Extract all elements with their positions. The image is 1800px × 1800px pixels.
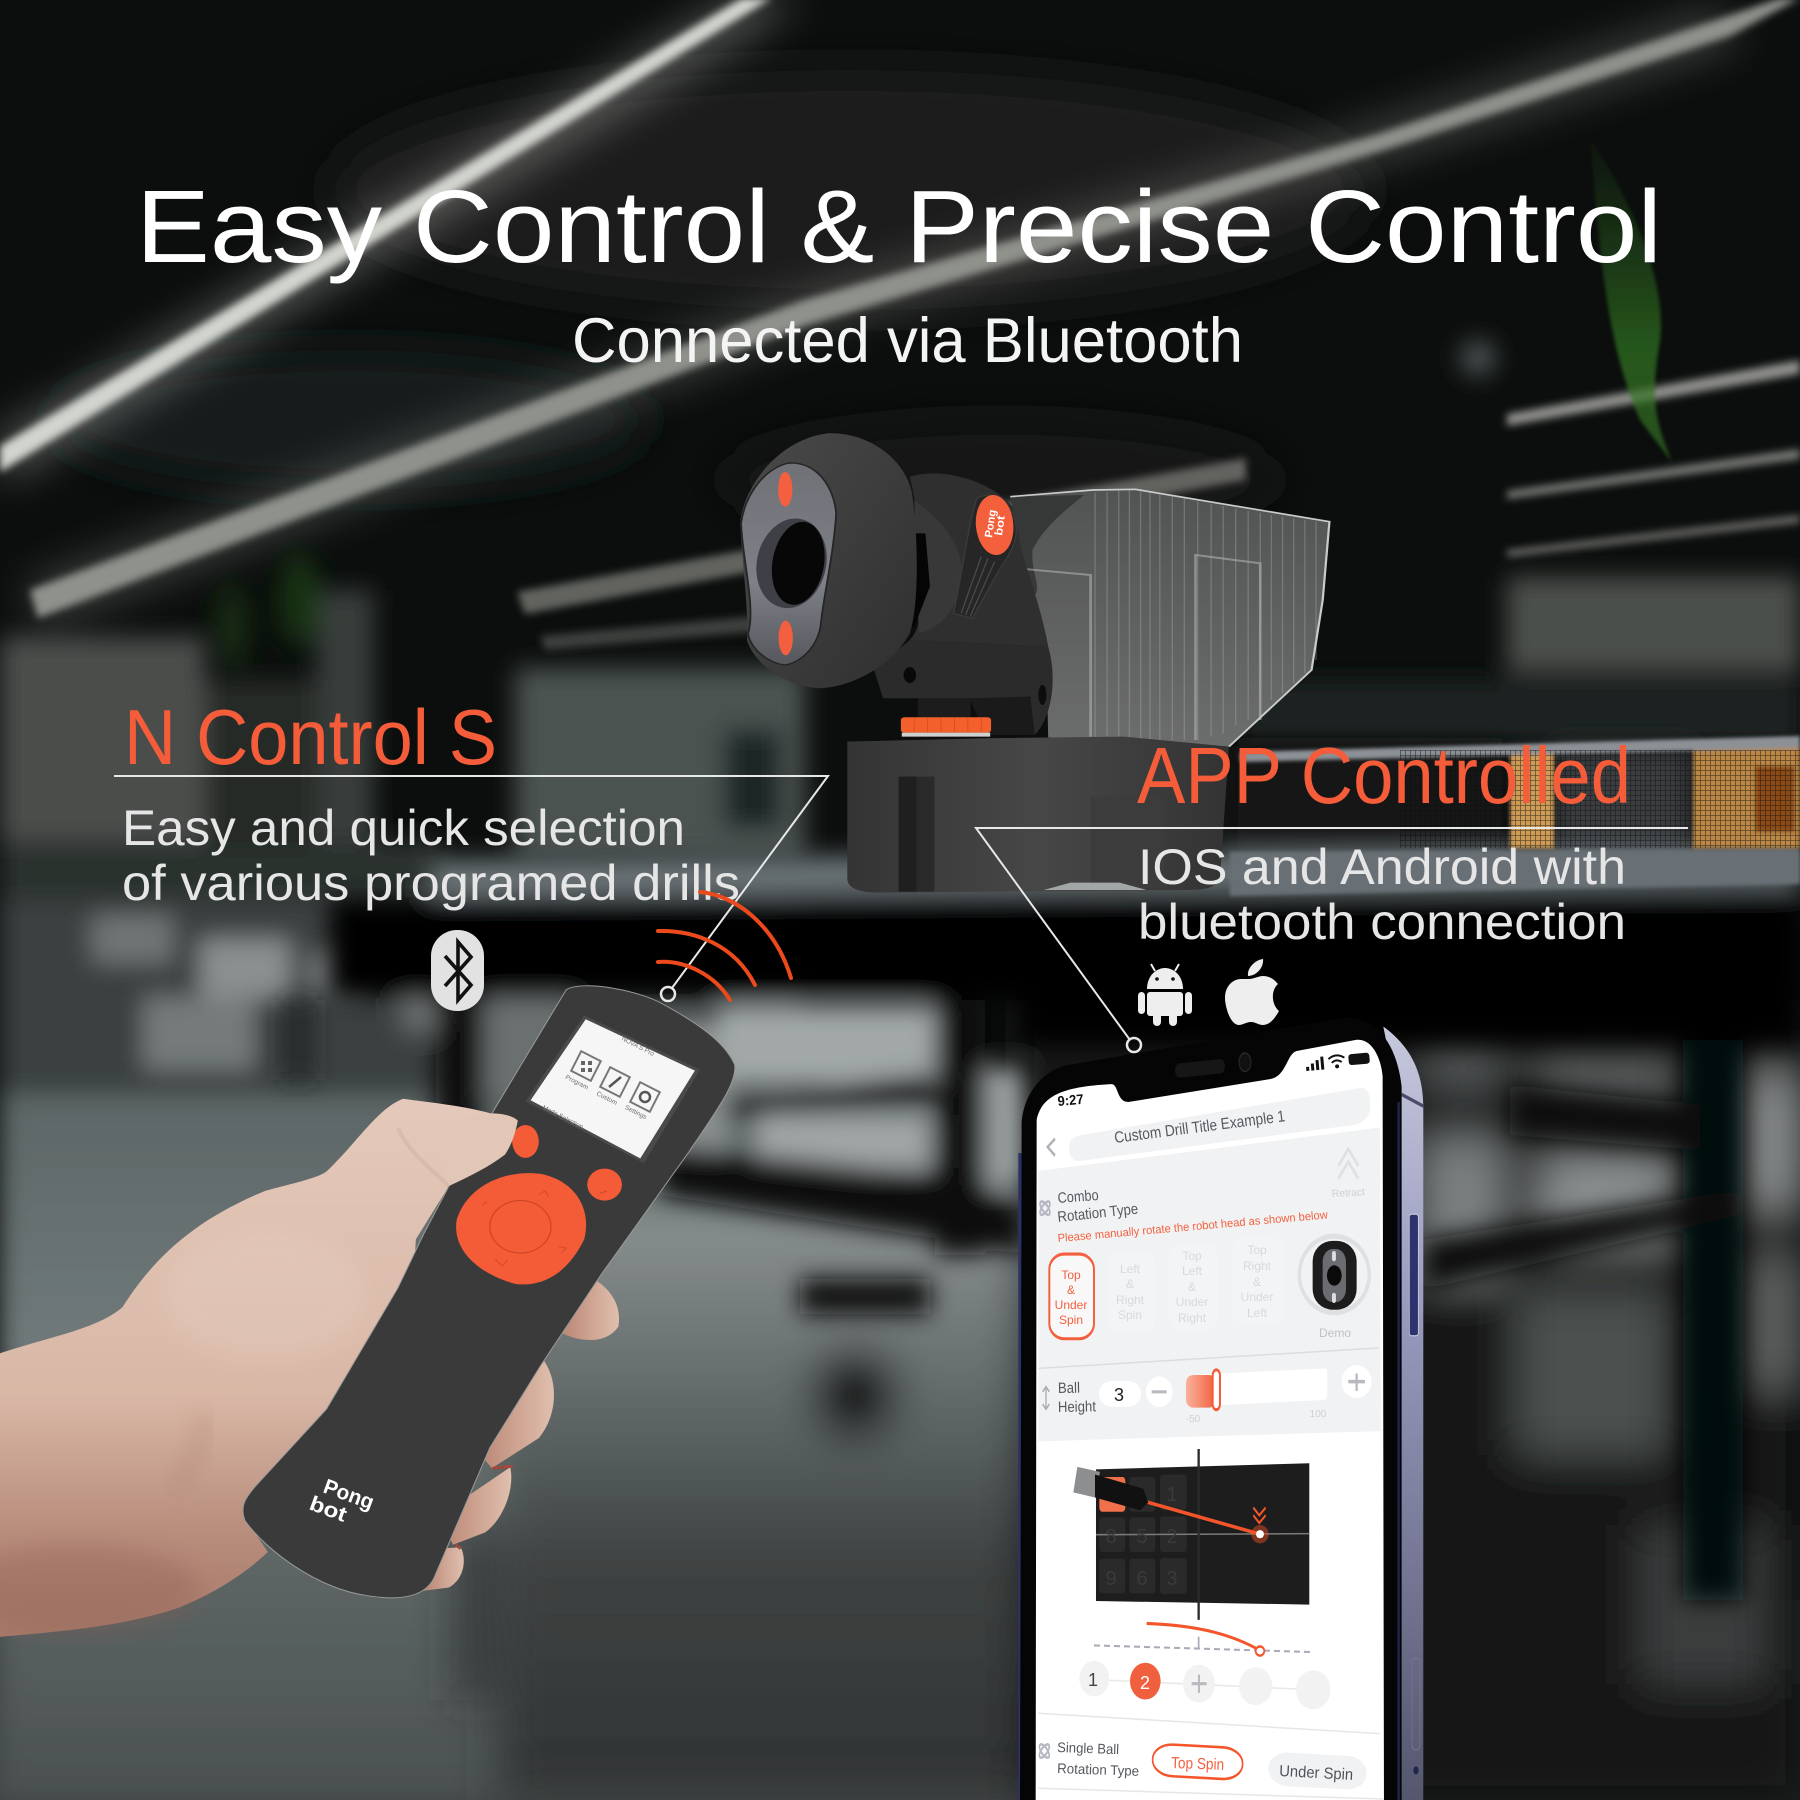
phone screen text: Demo (1319, 1326, 1351, 1340)
phone screen text: Custom Drill Title Example 1 (1113, 1108, 1286, 1147)
phone screen text: Ball (1058, 1380, 1080, 1397)
phone screen text: 2 (1166, 1526, 1178, 1548)
remote screen content: Settings (624, 1104, 648, 1121)
text: app description (1138, 839, 1626, 950)
phone screen text: & (1067, 1283, 1075, 1297)
ceiling light strips (0, 0, 1800, 650)
phone screen text: Under (1176, 1295, 1208, 1309)
signal waves (658, 892, 791, 1000)
phone screen text: Single Ball (1057, 1739, 1119, 1757)
phone screen text: 1 (1088, 1670, 1098, 1690)
robot logo: Pong (983, 509, 999, 538)
phone frame (1018, 1018, 1423, 1800)
phone screen text: Retract (1332, 1186, 1365, 1200)
phone screen text: Top (1182, 1249, 1202, 1263)
phone screen text: Under (1241, 1290, 1273, 1304)
phone screen text: Rotation Type (1057, 1760, 1140, 1779)
phone screen text: 100 (1310, 1409, 1327, 1420)
app screen panels (1038, 1088, 1381, 1441)
phone screen text: 6 (1136, 1568, 1148, 1590)
hand holding remote (0, 986, 735, 1637)
robot base (847, 737, 1229, 893)
robot logo (983, 509, 1008, 538)
text: remote description: of various programed drills (122, 855, 740, 911)
phone screen text: & (1126, 1277, 1134, 1291)
palm shading (0, 1128, 449, 1632)
phone screen text: Spin (1118, 1308, 1142, 1322)
remote body (243, 986, 735, 1598)
phone screen text: & (1253, 1275, 1261, 1289)
phone screen text: 3 (1166, 1568, 1178, 1590)
phone screen text: Height (1058, 1398, 1097, 1416)
phone screen text: Right (1116, 1293, 1145, 1307)
text: app description: IOS and Android with (1138, 839, 1626, 895)
phone (1018, 1018, 1423, 1800)
phone screen text: Left (1182, 1264, 1203, 1278)
robot body (874, 473, 1053, 737)
remote screen content: Program (564, 1074, 589, 1091)
net and table edge (1230, 736, 1800, 896)
ball hopper (1010, 489, 1329, 747)
phone screen text: 2 (1140, 1673, 1150, 1693)
remote logo (306, 1475, 377, 1527)
trajectory table diagram (1038, 1449, 1383, 1799)
phone screen text: Top (1061, 1268, 1081, 1282)
phone screen text: Right (1178, 1311, 1207, 1325)
robot head (740, 433, 917, 688)
green leaf glare (1590, 138, 1672, 462)
text: app description: bluetooth connection (1138, 894, 1626, 950)
text: remote description (122, 800, 740, 911)
fingers behind remote (422, 1273, 619, 1591)
phone screen text: 8 (1105, 1526, 1117, 1548)
remote screen content (541, 1035, 660, 1131)
phone screen text: Top Spin (1171, 1755, 1224, 1774)
text: remote description: Easy and quick selection (122, 800, 685, 856)
ceiling light glow (0, 0, 1740, 625)
phone screen text: 9 (1105, 1568, 1117, 1590)
title: Easy Control & Precise Control (136, 169, 1662, 284)
phone screen text: Under (1055, 1298, 1087, 1312)
phone screen text: Right (1243, 1259, 1272, 1273)
phone screen text: Please manually rotate the robot head as shown below (1057, 1209, 1329, 1245)
phone screen text: Rotation Type (1057, 1201, 1139, 1226)
phone screen text: & (1188, 1280, 1196, 1294)
phone screen text: Left (1247, 1306, 1268, 1320)
callout line: remote (114, 776, 828, 1001)
remote logo: Pong (320, 1475, 377, 1514)
phone screen text: 1 (1166, 1484, 1178, 1506)
status bar icons (1305, 1053, 1370, 1071)
phone screen text: Combo (1057, 1187, 1099, 1207)
phone screen text: 3 (1114, 1385, 1124, 1405)
remote screen content: NOVA S Pro (620, 1035, 655, 1058)
phone screen text: -50 (1186, 1414, 1201, 1425)
icon: android (1138, 964, 1192, 1026)
phone screen text: Spin (1059, 1313, 1083, 1327)
phone screen text: 9:27 (1057, 1091, 1084, 1109)
subtitle: Connected via Bluetooth (572, 306, 1243, 376)
robot (740, 433, 1329, 893)
phone screen text (1055, 1091, 1365, 1784)
phone screen text: Under Spin (1279, 1763, 1354, 1784)
phone screen text: Top (1247, 1243, 1267, 1257)
heading: APP Controlled: APP Controlled (1137, 731, 1631, 820)
hand (0, 1099, 519, 1637)
heading: N Control S: N Control S (124, 693, 497, 781)
remote buttons (445, 1113, 622, 1284)
remote screen content: Mode Selection (541, 1104, 585, 1131)
callout line: app (976, 828, 1688, 1052)
robot logo: bot (993, 515, 1008, 536)
icon: apple (1225, 959, 1279, 1025)
icon: bluetooth (431, 930, 484, 1011)
phone screen text: Left (1120, 1262, 1141, 1276)
remote screen content: Custom (595, 1090, 618, 1107)
phone screen text: 5 (1136, 1526, 1148, 1548)
remote logo: bot (306, 1492, 350, 1527)
